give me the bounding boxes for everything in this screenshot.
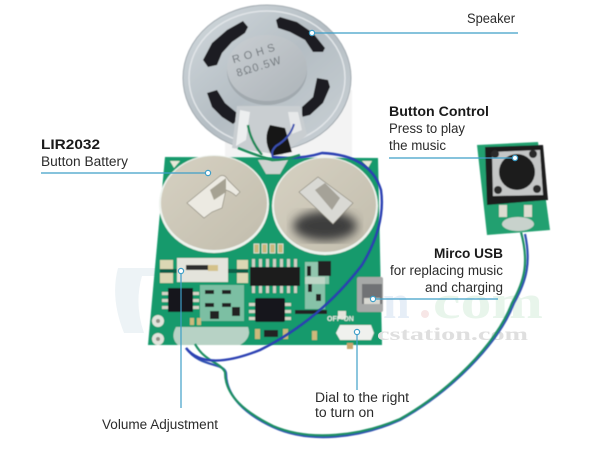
callout: button control: Button Control [389, 103, 489, 119]
callout: micro usb: and charging [425, 280, 503, 295]
battery: left coin cell [159, 155, 269, 253]
callout: speaker: Speaker [467, 11, 515, 26]
speaker slots [203, 17, 330, 124]
callout: battery: LIR2032 [41, 136, 100, 152]
wires [186, 148, 528, 437]
callout: dial: to turn on [315, 405, 374, 420]
resistors row [254, 244, 283, 253]
micro usb port [357, 277, 383, 312]
pcb [148, 155, 383, 349]
callout: speaker [309, 11, 518, 36]
watermark text: cstation.com [377, 324, 528, 344]
watermark: n [383, 276, 410, 329]
callout: dial: Dial to the right [315, 390, 409, 405]
watermark: com [433, 276, 543, 329]
speaker cap [227, 37, 307, 105]
solder joint [258, 160, 288, 174]
dial switch [327, 316, 374, 349]
speaker label [231, 41, 283, 80]
callout: volume adjustment: Volume Adjustment [102, 417, 218, 432]
glue blob [173, 327, 249, 345]
potentiometer [160, 258, 248, 283]
callout: battery: Button Battery [41, 154, 128, 169]
ic chip: left [162, 288, 199, 312]
ic chip: main [250, 259, 300, 293]
battery: right coin cell [272, 157, 378, 255]
speaker bracket [232, 106, 307, 155]
callout: dial [315, 329, 409, 420]
small components [190, 261, 346, 340]
callout: micro usb: Mirco USB [434, 245, 503, 261]
callout: micro usb: for replacing music [390, 263, 503, 278]
callout: button control [389, 103, 518, 161]
speaker [183, 5, 352, 160]
callout: battery [41, 136, 211, 176]
mounting holes [152, 315, 164, 345]
ic chip: square [249, 298, 291, 322]
callout: button control: the music [389, 138, 446, 153]
callout: button control: Press to play [389, 121, 465, 136]
speaker label: ROHS [231, 42, 276, 66]
watermark [115, 268, 543, 333]
callout: micro usb [370, 245, 503, 302]
dial switch: OFF-ON [327, 316, 354, 323]
callout: volume adjustment [102, 268, 218, 432]
speaker label: 8Ω0.5W [235, 55, 283, 80]
button module [477, 142, 550, 235]
